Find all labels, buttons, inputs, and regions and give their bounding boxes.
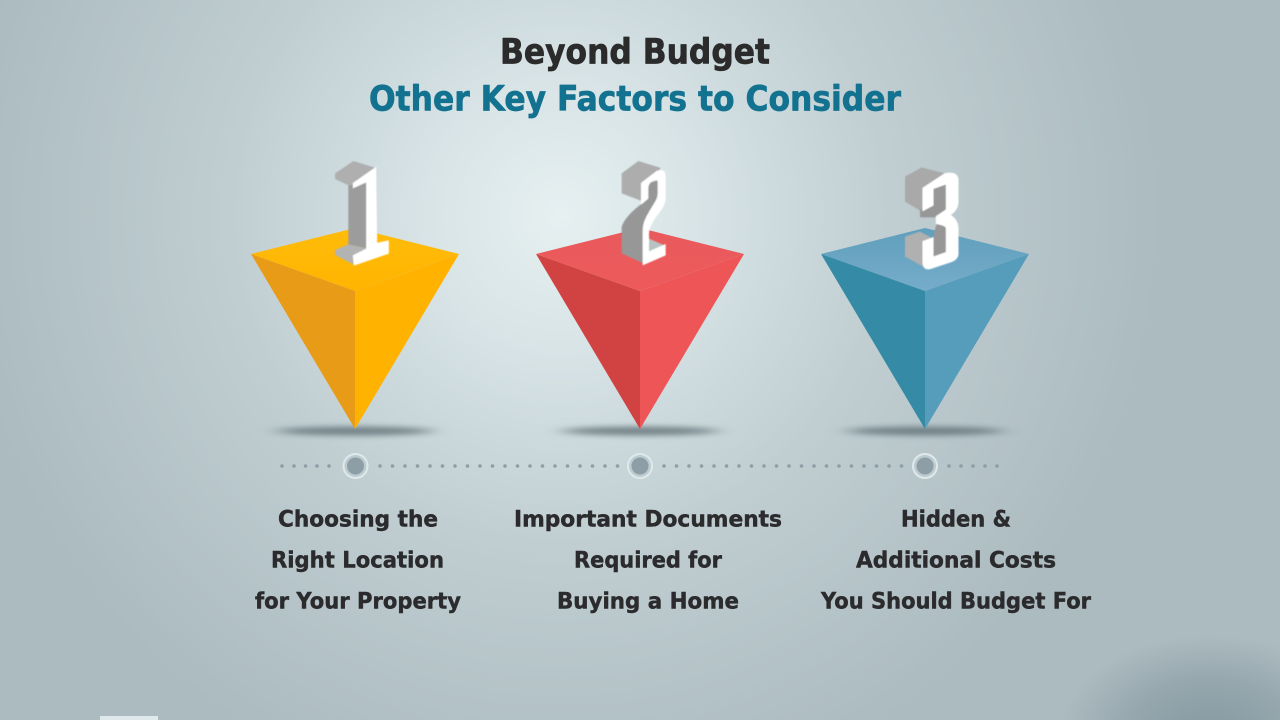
title: Beyond Budget (500, 32, 770, 72)
label 1: Right Location (271, 548, 444, 574)
timeline (280, 453, 999, 479)
shadows under pyramids (277, 426, 1003, 436)
timeline dots (280, 464, 999, 468)
label 3 (820, 508, 1091, 614)
label 1 (255, 508, 461, 614)
label 1: Choosing the (278, 508, 438, 532)
pyramid 1: yellow (251, 161, 459, 429)
label 3: You Should Budget For (820, 590, 1091, 614)
pyramid 3: blue (821, 167, 1029, 429)
pyramid 2: red (536, 161, 744, 429)
title: Other Key Factors to Consider (369, 80, 901, 120)
timeline node 2 (627, 453, 653, 479)
label 2: Important Documents (514, 508, 782, 532)
number 1 (335, 161, 388, 265)
label 2: Required for (574, 548, 722, 574)
label 3: Hidden & (901, 508, 1011, 532)
label 1: for Your Property (255, 590, 461, 614)
label 2: Buying a Home (557, 590, 739, 614)
number 3 (905, 167, 958, 269)
label 2 (514, 508, 782, 614)
timeline node 1 (342, 453, 368, 479)
label 3: Additional Costs (856, 548, 1056, 574)
timeline node 3 (912, 453, 938, 479)
title (369, 32, 901, 120)
number 2 (622, 161, 665, 264)
